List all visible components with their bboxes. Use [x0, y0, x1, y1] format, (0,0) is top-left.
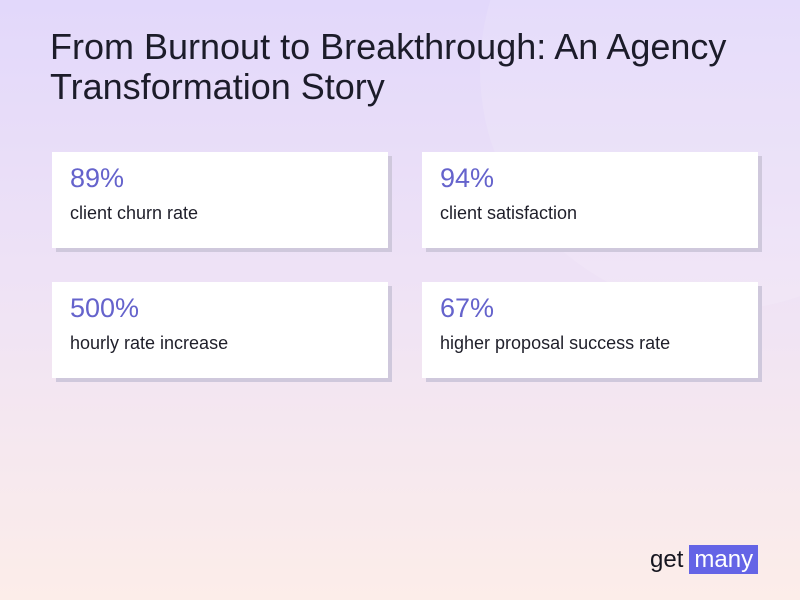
card: hourly rate — [52, 282, 388, 378]
card: proposal success: 67% — [440, 293, 494, 323]
card: churn: 89% — [70, 163, 124, 193]
card: churn — [52, 152, 388, 248]
card: churn: client churn rate — [70, 203, 198, 223]
logo: many — [694, 546, 753, 573]
title: From Burnout to Breakthrough: An Agency Transformation Story — [50, 26, 726, 107]
logo: get — [650, 546, 683, 572]
logo — [650, 545, 758, 574]
card: satisfaction: 94% — [440, 163, 494, 193]
card: hourly rate: 500% — [70, 293, 139, 323]
card: satisfaction: client satisfaction — [440, 203, 577, 223]
card: hourly rate: hourly rate increase — [70, 333, 228, 353]
card: proposal success: higher proposal success rate — [440, 333, 670, 353]
card: satisfaction — [422, 152, 758, 248]
card: proposal success — [422, 282, 758, 378]
